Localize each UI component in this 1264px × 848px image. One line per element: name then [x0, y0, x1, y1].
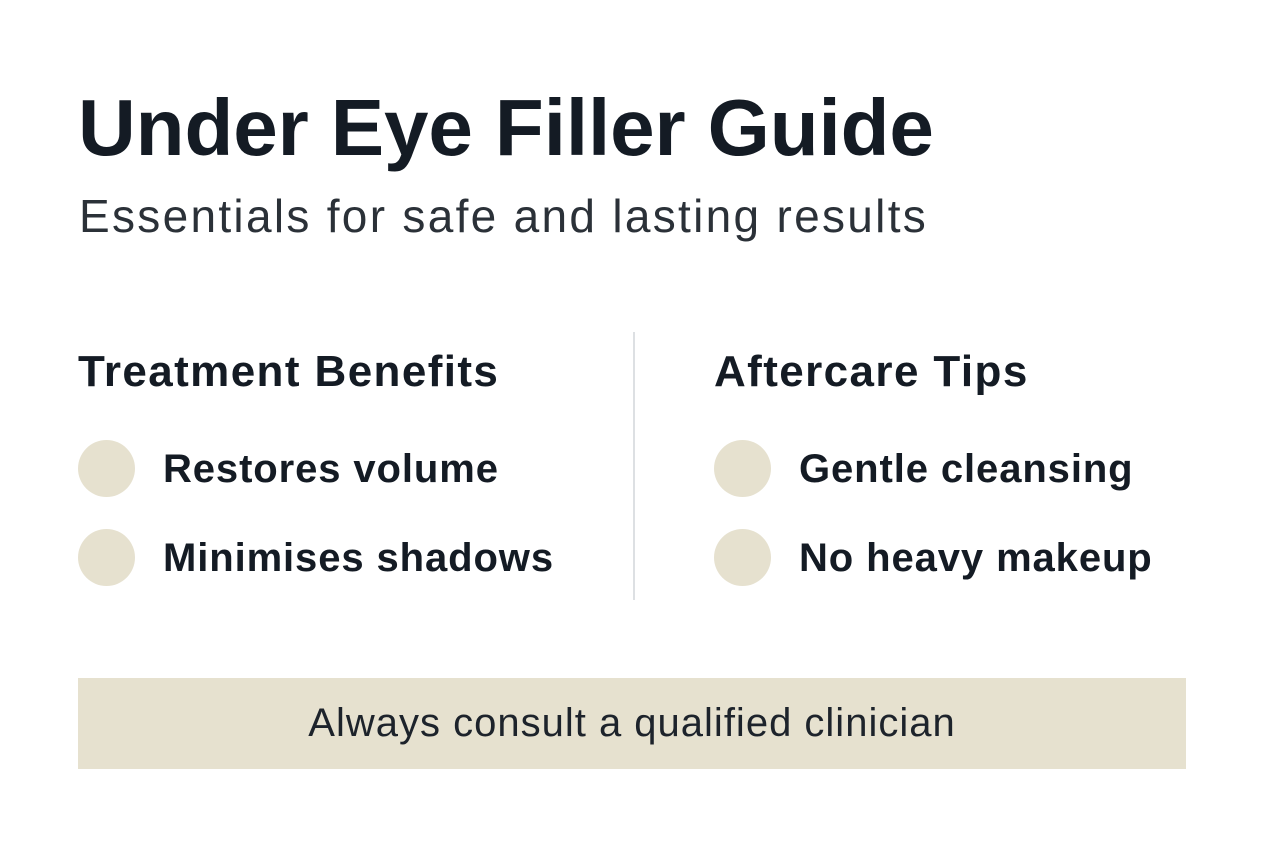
panel: aftercare tips	[714, 347, 1153, 586]
item: restores volume: Restores volume	[163, 447, 499, 491]
heading: aftercare tips: Aftercare Tips	[714, 347, 1029, 396]
heading: treatment benefits: Treatment Benefits	[78, 347, 499, 396]
item: no heavy makeup	[714, 529, 1153, 586]
item: gentle cleansing: Gentle cleansing	[799, 447, 1134, 491]
subtitle: Essentials for safe and lasting results	[79, 190, 928, 242]
item: minimises shadows: Minimises shadows	[163, 536, 554, 580]
title: Under Eye Filler Guide	[78, 83, 934, 172]
item: gentle cleansing	[714, 440, 1134, 497]
item: restores volume	[78, 440, 499, 497]
panel: treatment benefits	[78, 347, 554, 586]
item: minimises shadows	[78, 529, 554, 586]
callout banner	[78, 678, 1186, 769]
callout banner: Always consult a qualified clinician	[308, 701, 956, 745]
item: no heavy makeup: No heavy makeup	[799, 536, 1153, 580]
